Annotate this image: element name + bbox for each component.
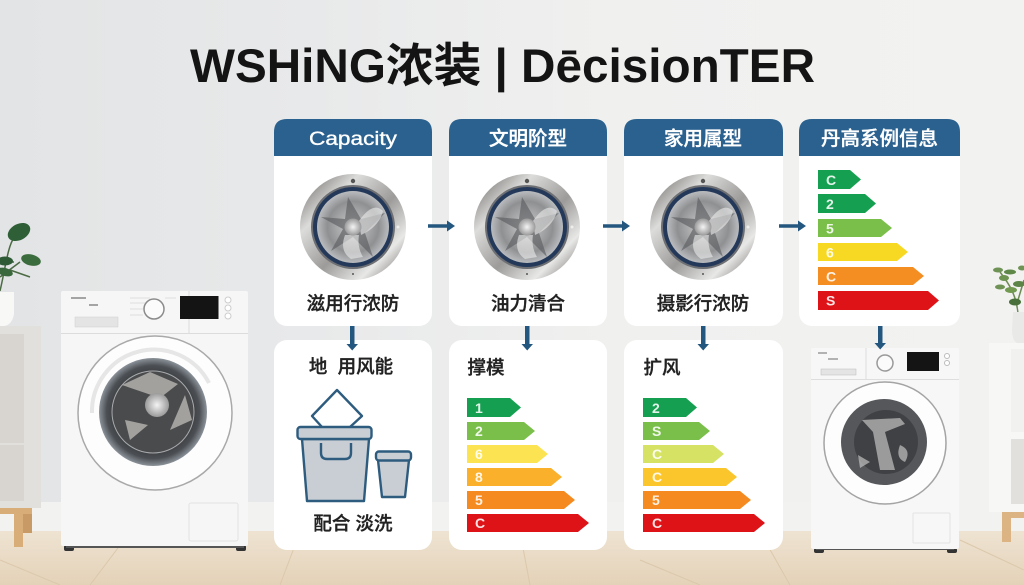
energy rating chart: 1 — [475, 400, 483, 416]
header — [799, 119, 960, 156]
skirting board — [0, 502, 1024, 532]
heading: 扩风 — [643, 357, 681, 378]
label: 油力清合 — [491, 293, 565, 314]
energy rating chart — [643, 398, 765, 532]
arrow: down column one — [346, 326, 358, 350]
label: 摄影行浓防 — [657, 293, 749, 314]
energy rating chart — [818, 170, 939, 310]
heading: 撑模 — [467, 357, 505, 378]
icon: washer drum — [650, 174, 756, 280]
panel: 地 用风能 — [274, 340, 432, 550]
energy rating chart: 5 — [826, 220, 834, 236]
energy rating chart: S — [652, 423, 661, 439]
label: 滋用行浓防 — [307, 293, 399, 314]
energy rating chart: 2 — [475, 423, 483, 439]
left plant pot — [0, 292, 14, 326]
header: Capacity — [274, 119, 432, 156]
panel: 文明阶型 — [449, 119, 607, 326]
arrow: down column three — [698, 326, 709, 350]
icon: bucket and cup — [298, 390, 411, 501]
header: Capacity: Capacity — [309, 128, 397, 150]
right plant — [993, 266, 1024, 313]
left washing machine — [61, 291, 248, 551]
icon: washer drum — [300, 174, 406, 280]
header: 家用属型 — [664, 128, 742, 150]
panel: 家用属型 — [624, 119, 783, 326]
left cabinet — [0, 326, 41, 547]
energy rating chart: C — [652, 515, 662, 531]
energy rating chart: C — [475, 515, 485, 531]
energy rating chart — [467, 398, 589, 532]
panel: 扩风 — [624, 340, 783, 550]
energy rating chart: C — [652, 446, 662, 462]
arrow: third to fourth panel — [779, 220, 806, 232]
energy rating chart: 5 — [652, 492, 660, 508]
energy rating chart: 8 — [475, 469, 483, 485]
right plant pot — [1012, 312, 1024, 343]
header — [624, 119, 783, 156]
header: 丹高系例信息 — [821, 128, 938, 150]
heading: 地 用风能 — [309, 356, 393, 377]
label: 配合 淡洗 — [313, 513, 393, 534]
energy rating chart: C — [652, 469, 662, 485]
panel: Capacity — [274, 119, 432, 326]
energy rating chart: 2 — [826, 196, 834, 212]
right washing machine — [811, 348, 959, 553]
title: WSHiNG浓装 | DēcisionTER — [190, 39, 815, 92]
arrow: capacity to second panel — [428, 220, 455, 232]
header — [449, 119, 607, 156]
wooden floor — [0, 531, 1024, 585]
energy rating chart: 2 — [652, 400, 660, 416]
energy rating chart: C — [826, 172, 836, 188]
icon: washer drum — [474, 174, 580, 280]
panel: 丹高系例信息 — [799, 119, 960, 326]
arrow: down to right washer — [874, 326, 886, 350]
panel: 撑模 — [449, 340, 607, 550]
header: 文明阶型 — [489, 128, 567, 150]
energy rating chart: 5 — [475, 492, 483, 508]
arrow: second to third panel — [603, 220, 630, 232]
arrow: down column two — [522, 326, 533, 350]
energy rating chart: C — [826, 268, 836, 284]
left plant — [0, 219, 42, 291]
energy rating chart: S — [826, 292, 835, 308]
energy rating chart: 6 — [826, 244, 834, 260]
energy rating chart: 6 — [475, 446, 483, 462]
right cabinet — [989, 343, 1024, 542]
